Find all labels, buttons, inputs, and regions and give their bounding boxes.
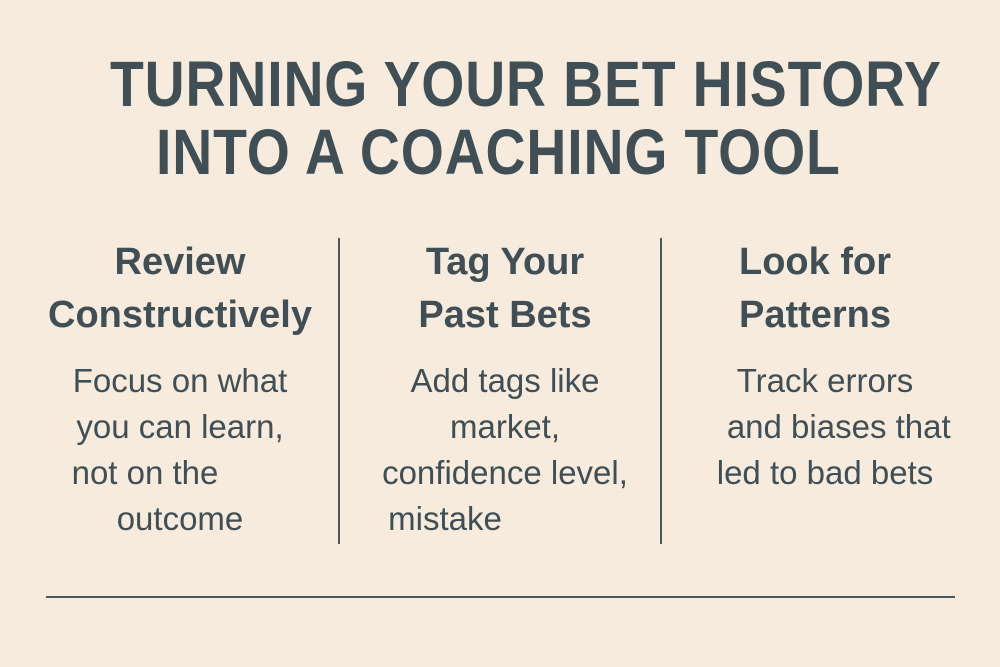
text: patterns: and biases that [727, 408, 951, 445]
text: review: Focus on what [73, 362, 287, 399]
text: tag [382, 362, 628, 537]
heading: patterns: Patterns [739, 294, 891, 336]
panel: tag [382, 241, 628, 537]
heading: review [48, 241, 312, 336]
heading: tag: Tag Your [426, 241, 584, 283]
title: TURNING YOUR BET HISTORY [110, 48, 942, 120]
heading: patterns: Look for [739, 241, 891, 283]
text: patterns [717, 362, 951, 491]
heading: tag [418, 241, 592, 336]
heading: tag: Past Bets [418, 294, 592, 336]
text: tag: market, [450, 408, 560, 445]
text: patterns: Track errors [737, 362, 913, 399]
panel: review [48, 241, 312, 537]
text: review: not on the [72, 454, 218, 491]
text: tag: mistake [388, 500, 502, 537]
title: INTO A COACHING TOOL [156, 116, 841, 188]
text: review: you can learn, [76, 408, 284, 445]
text: patterns: led to bad bets [717, 454, 933, 491]
heading: patterns [739, 241, 891, 336]
title [110, 48, 942, 188]
heading: review: Constructively [48, 294, 312, 336]
text: tag: confidence level, [382, 454, 628, 491]
text: tag: Add tags like [411, 362, 599, 399]
text: review [72, 362, 288, 537]
panel: patterns [717, 241, 951, 491]
text: review: outcome [117, 500, 243, 537]
heading: review: Review [115, 241, 245, 283]
